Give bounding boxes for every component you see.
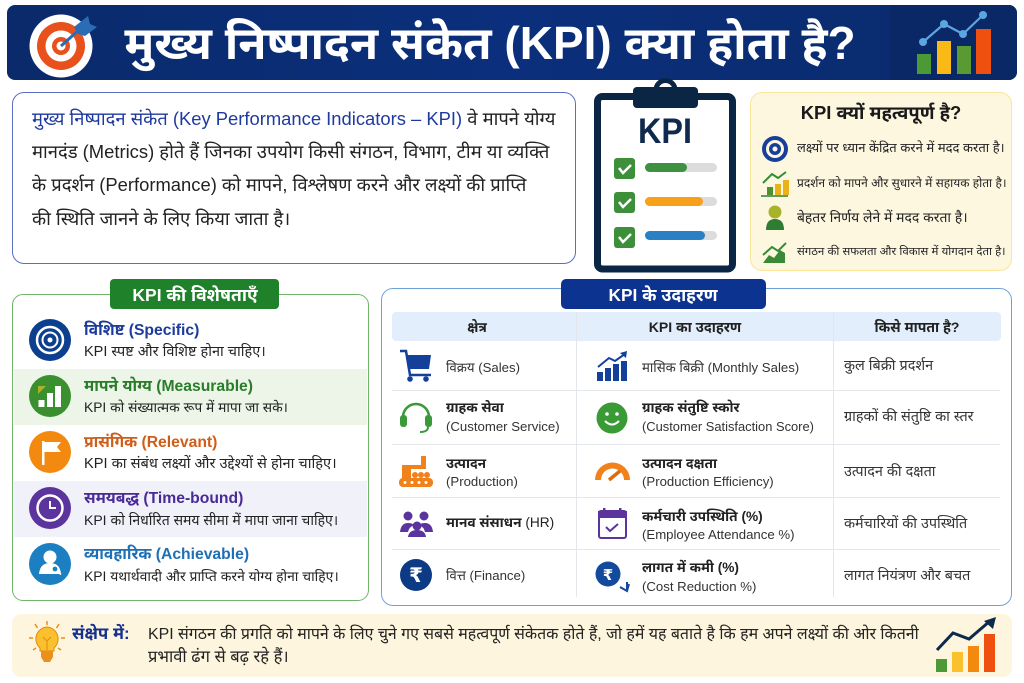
row: finance: लागत में कमी (%) <box>642 560 739 575</box>
why point 1: लक्ष्यों पर ध्यान केंद्रित करने में मदद करता है। <box>797 140 1005 155</box>
row: production: उत्पादन <box>446 456 486 471</box>
definition text: के प्रदर्शन (Performance) को मापने, विश्लेषण करने और लक्ष्यों की प्राप्ति <box>32 174 526 195</box>
examples heading <box>561 279 766 309</box>
row: finance <box>446 560 971 594</box>
feature: time-bound: समयबद्ध (Time-bound) <box>84 490 243 507</box>
row: finance: (Cost Reduction %) <box>642 579 756 594</box>
definition text: मानदंड (Metrics) होते हैं जिनका उपयोग किसी संगठन, विभाग, टीम या व्यक्ति <box>32 141 549 162</box>
feature: measurable <box>84 376 288 415</box>
panel: KPI examples <box>381 288 1012 606</box>
row: production: (Production Efficiency) <box>642 474 774 489</box>
row: customer service: ग्राहकों की संतुष्टि का स्तर <box>844 409 974 425</box>
definition text <box>32 108 556 229</box>
definition text: मुख्य निष्पादन संकेत (Key Performance Indicators – KPI) वे मापने योग्य <box>32 108 555 129</box>
row: production: (Production) <box>446 474 518 489</box>
icon: KPI clipboard: KPI <box>638 112 692 151</box>
row: production: उत्पादन दक्षता <box>642 456 717 471</box>
feature: achievable: व्यावहारिक (Achievable) <box>84 546 249 563</box>
feature: specific: विशिष्ट (Specific) <box>84 322 199 339</box>
feature: specific <box>84 320 266 360</box>
summary text <box>148 624 919 666</box>
feature: relevant <box>84 432 337 472</box>
panel: definition <box>12 92 576 264</box>
row: production: उत्पादन की दक्षता <box>844 464 936 480</box>
row: finance: लागत नियंत्रण और बचत <box>844 568 970 584</box>
row: sales <box>446 357 934 375</box>
feature: achievable <box>84 544 339 584</box>
row: sales: विक्रय (Sales) <box>446 360 520 375</box>
row: customer service: (Customer Service) <box>446 419 560 434</box>
summary text: प्रभावी ढंग से बढ़ रहे हैं। <box>148 648 289 666</box>
row: finance: वित्त (Finance) <box>446 568 525 583</box>
row: HR <box>446 508 968 542</box>
why point 2: प्रदर्शन को मापने और सुधारने में सहायक होता है। <box>797 176 1006 190</box>
icon: target with arrow <box>30 14 97 78</box>
feature: time-bound <box>84 490 338 528</box>
row: HR: कर्मचारी उपस्थिति (%) <box>642 509 763 524</box>
table header: किसे मापता है? <box>875 319 959 335</box>
feature: specific: KPI स्पष्ट और विशिष्ट होना चाहिए। <box>84 344 266 360</box>
row: production <box>446 456 936 489</box>
summary text: KPI संगठन की प्रगति को मापने के लिए चुने गए सबसे महत्वपूर्ण संकेतक होते हैं, जो हमें यह बताते है कि हम अपने लक्ष्यों की ओर कितनी <box>148 626 919 643</box>
why point 3: बेहतर निर्णय लेने में मदद करता है। <box>797 209 967 225</box>
feature: relevant: KPI का संबंध लक्ष्यों और उद्देश्यों से होना चाहिए। <box>84 456 337 472</box>
table header <box>392 312 1001 341</box>
icons: table: ₹ <box>409 563 423 587</box>
panel: summary <box>12 614 1012 677</box>
feature: relevant: प्रासंगिक (Relevant) <box>84 434 217 451</box>
header right dark section <box>890 5 1017 80</box>
row: customer service: ग्राहक सेवा <box>446 400 504 415</box>
header banner <box>7 5 1017 80</box>
table header: KPI का उदाहरण <box>649 319 741 335</box>
row: HR: (Employee Attendance %) <box>642 527 794 542</box>
feature: measurable: मापने योग्य (Measurable) <box>84 378 253 395</box>
panel: why KPI matters <box>750 92 1012 271</box>
features heading <box>110 279 279 309</box>
why heading: KPI क्यों महत्वपूर्ण है? <box>801 102 961 123</box>
row: sales: कुल बिक्री प्रदर्शन <box>844 358 933 374</box>
why point 4: संगठन की सफलता और विकास में योगदान देता है। <box>797 246 1006 258</box>
row: HR: कर्मचारियों की उपस्थिति <box>844 516 967 532</box>
table header: क्षेत्र <box>467 319 487 335</box>
row: HR: मानव संसाधन (HR) <box>446 515 554 530</box>
icon: header bar chart <box>917 11 991 74</box>
examples heading: KPI के उदाहरण <box>609 285 717 305</box>
row highlight: time-bound <box>14 481 367 537</box>
feature: achievable: KPI यथार्थवादी और प्राप्ति करने योग्य होना चाहिए। <box>84 568 339 584</box>
features heading: KPI की विशेषताएँ <box>132 285 258 305</box>
row: customer service: ग्राहक संतुष्टि स्कोर <box>642 400 740 415</box>
definition text: की स्थिति जानने के लिए किया जाता है। <box>32 208 290 229</box>
row highlight: measurable <box>14 369 367 425</box>
row: sales: मासिक बिक्री (Monthly Sales) <box>642 360 799 375</box>
feature: time-bound: KPI को निर्धारित समय सीमा में मापा जाना चाहिए। <box>84 512 338 528</box>
icons: table: ₹ <box>603 566 613 584</box>
summary label: संक्षेप में: <box>72 624 130 643</box>
feature: measurable: KPI को संख्यात्मक रूप में मापा जा सके। <box>84 400 288 415</box>
panel: KPI features <box>12 294 369 601</box>
row: customer service: (Customer Satisfaction Score) <box>642 419 814 434</box>
title: मुख्य निष्पादन संकेत (KPI) क्या होता है? <box>124 17 856 69</box>
row: customer service <box>446 400 974 434</box>
